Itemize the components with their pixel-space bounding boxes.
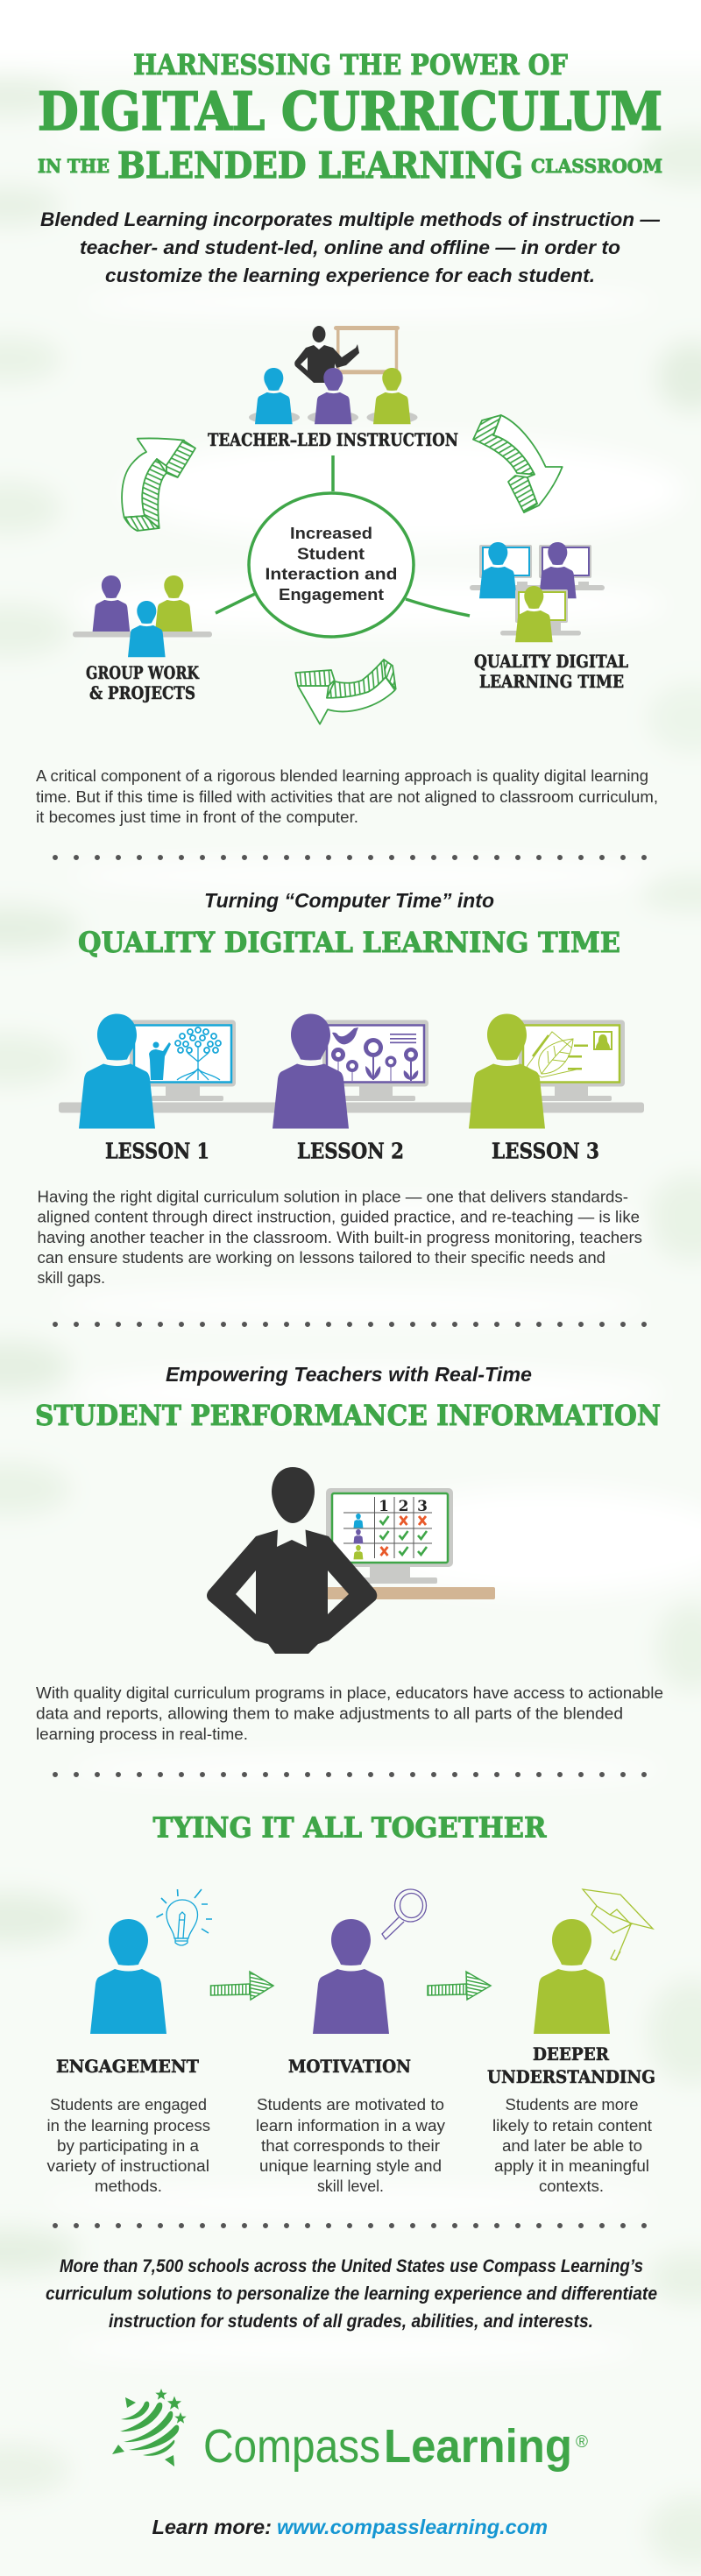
label: group work: & PROJECTS xyxy=(89,683,195,703)
text: motivation: skill level. xyxy=(317,2177,384,2195)
label: deeper understanding xyxy=(487,2043,655,2087)
teacher figure xyxy=(207,1467,377,1654)
desk xyxy=(59,1102,644,1112)
text: engagement: by participating in a xyxy=(57,2136,200,2155)
closing statement: instruction for students of all grades, abilities, and interests. xyxy=(109,2311,593,2332)
closing statement: More than 7,500 schools across the United States use Compass Learning’s xyxy=(60,2256,643,2276)
text: motivation: unique learning style and xyxy=(259,2156,442,2175)
label: quality digital learning time: QUALITY DIGITAL xyxy=(474,652,628,672)
lesson labels: LESSON 1 xyxy=(105,1139,209,1163)
paragraph: critical component xyxy=(36,767,658,826)
heading: tying it all together: TYING IT ALL TOGETHER xyxy=(152,1811,547,1845)
desk xyxy=(324,1587,495,1599)
student figure green xyxy=(534,1919,610,2034)
text: deeper understanding: apply it in meaningful xyxy=(494,2156,649,2175)
title: HARNESSING THE POWER OF xyxy=(133,48,568,81)
logo wordmark: ® xyxy=(576,2433,588,2452)
logo wordmark: Compass xyxy=(203,2420,380,2473)
illustration: three lessons at computers xyxy=(59,1014,644,1128)
label: motivation: MOTIVATION xyxy=(288,2056,411,2077)
paragraph: right digital curriculum: Having the right digital curriculum solution in place — one that delivers standards- xyxy=(37,1188,628,1205)
icon: digital learning stations xyxy=(470,542,605,642)
lesson labels xyxy=(105,1139,599,1163)
paragraph: educators have access: learning process in real-time. xyxy=(36,1726,248,1743)
intro text xyxy=(40,208,661,286)
column: motivation xyxy=(256,1889,446,2195)
text: deeper understanding: contexts. xyxy=(539,2177,604,2195)
heading: quality digital learning time: QUALITY DIGITAL LEARNING TIME xyxy=(78,926,620,959)
monitor with results table: 2 xyxy=(399,1498,408,1515)
paragraph: educators have access xyxy=(36,1684,663,1743)
title: IN THE xyxy=(38,155,110,177)
column: engagement xyxy=(47,1889,212,2195)
title: CLASSROOM xyxy=(531,155,662,177)
paragraph: right digital curriculum: having another teacher in the classroom. With built-in progress monitoring, teachers xyxy=(37,1229,642,1246)
center circle: Interaction and xyxy=(265,564,398,583)
learn more link: Learn more: xyxy=(152,2516,272,2538)
logo: CompassLearning xyxy=(112,2389,588,2473)
arrow: teacher to digital learning xyxy=(473,415,563,512)
text: deeper understanding: and later be able to xyxy=(502,2136,642,2155)
center circle: Engagement xyxy=(279,585,384,603)
diagram: blended learning cycle xyxy=(73,326,628,724)
text: engagement xyxy=(47,2095,210,2195)
icon: teacher-led instruction xyxy=(249,326,417,424)
closing statement: curriculum solutions to personalize the learning experience and differentiate xyxy=(46,2284,657,2304)
arrow: motivation to deeper understanding xyxy=(428,1972,491,2000)
lesson 2 computer xyxy=(322,1020,428,1101)
text: engagement: Students are engaged xyxy=(50,2095,207,2114)
intro text: teacher- and student-led, online and offline — in order to xyxy=(80,236,620,258)
text: engagement: in the learning process xyxy=(47,2116,210,2135)
center circle: Increased xyxy=(290,524,372,542)
arrow: group work to teacher xyxy=(122,438,195,531)
paragraph: right digital curriculum xyxy=(37,1188,642,1287)
label: teacher-led instruction: TEACHER–LED INSTRUCTION xyxy=(208,430,458,450)
lesson labels: LESSON 2 xyxy=(297,1139,404,1163)
paragraph: right digital curriculum: aligned content through direct instruction, guided practice, and re-teaching — is like xyxy=(37,1209,640,1226)
monitor with results table: 1 xyxy=(379,1498,389,1515)
text: motivation xyxy=(256,2095,446,2195)
lesson labels: LESSON 3 xyxy=(492,1139,599,1163)
heading: student performance information: STUDENT PERFORMANCE INFORMATION xyxy=(35,1399,661,1432)
title: BLENDED LEARNING xyxy=(117,145,523,187)
icon: graduation cap xyxy=(583,1889,653,1960)
center circle xyxy=(249,493,414,637)
logo wordmark: Learning xyxy=(384,2420,572,2473)
monitor with results table: 3 xyxy=(417,1498,428,1515)
column: deeper understanding xyxy=(487,1889,655,2195)
label: group work: GROUP WORK xyxy=(86,663,200,683)
paragraph: critical component: time. But if this time is filled with activities that are not aligned to classroom curriculum, xyxy=(36,788,658,806)
text: engagement: variety of instructional xyxy=(47,2156,209,2175)
paragraph: right digital curriculum: can ensure students are working on lessons tailored to their specific needs and xyxy=(37,1249,605,1267)
label: deeper understanding: DEEPER xyxy=(533,2043,609,2064)
students xyxy=(79,1014,545,1128)
title xyxy=(38,48,662,187)
student figure blue xyxy=(90,1919,166,2034)
connector lines xyxy=(216,455,470,616)
label: group work xyxy=(86,663,200,703)
logo mark xyxy=(112,2389,187,2467)
paragraph: educators have access: With quality digital curriculum programs in place, educators have access to actionable xyxy=(36,1684,663,1702)
arrow: digital learning to group work xyxy=(295,660,396,724)
icon: magnifying glass xyxy=(382,1889,426,1939)
icon: group work xyxy=(73,575,212,657)
closing statement xyxy=(46,2256,657,2332)
paragraph: critical component: it becomes just time in front of the computer. xyxy=(36,808,358,826)
illustration: teacher with report xyxy=(207,1467,495,1654)
logo wordmark xyxy=(203,2420,588,2473)
text: deeper understanding: Students are more xyxy=(505,2095,638,2114)
monitor with results table xyxy=(326,1488,453,1584)
icon: light bulb xyxy=(156,1889,212,1945)
learn more link: www.compasslearning.com xyxy=(277,2516,548,2538)
label: quality digital learning time: LEARNING TIME xyxy=(479,672,624,692)
label: deeper understanding: UNDERSTANDING xyxy=(487,2066,655,2087)
intro text: Blended Learning incorporates multiple methods of instruction — xyxy=(40,208,661,230)
text: motivation: that corresponds to their xyxy=(261,2136,440,2155)
paragraph: critical component: A critical component of a rigorous blended learning approach is quality digital learning xyxy=(36,767,648,785)
subheading: turning computer time: Turning “Computer Time” into xyxy=(204,889,494,912)
text: motivation: Students are motivated to xyxy=(257,2095,444,2114)
text: deeper understanding xyxy=(492,2095,652,2195)
lesson 1 computer xyxy=(130,1020,236,1101)
lesson 3 computer xyxy=(519,1020,625,1101)
student figure purple xyxy=(313,1919,389,2034)
label: engagement: ENGAGEMENT xyxy=(56,2056,199,2077)
center circle: Student xyxy=(297,545,365,562)
text: motivation: learn information in a way xyxy=(256,2116,446,2135)
text: engagement: methods. xyxy=(95,2177,162,2195)
text: deeper understanding: likely to retain content xyxy=(492,2116,652,2135)
arrow: engagement to motivation xyxy=(210,1972,273,2000)
subheading: empowering teachers: Empowering Teachers with Real-Time xyxy=(166,1363,532,1386)
intro text: customize the learning experience for each student. xyxy=(105,265,595,286)
paragraph: educators have access: data and reports, allowing them to make adjustments to all parts of the blended xyxy=(36,1704,623,1722)
paragraph: right digital curriculum: skill gaps. xyxy=(37,1269,105,1287)
label: quality digital learning time xyxy=(474,652,628,692)
